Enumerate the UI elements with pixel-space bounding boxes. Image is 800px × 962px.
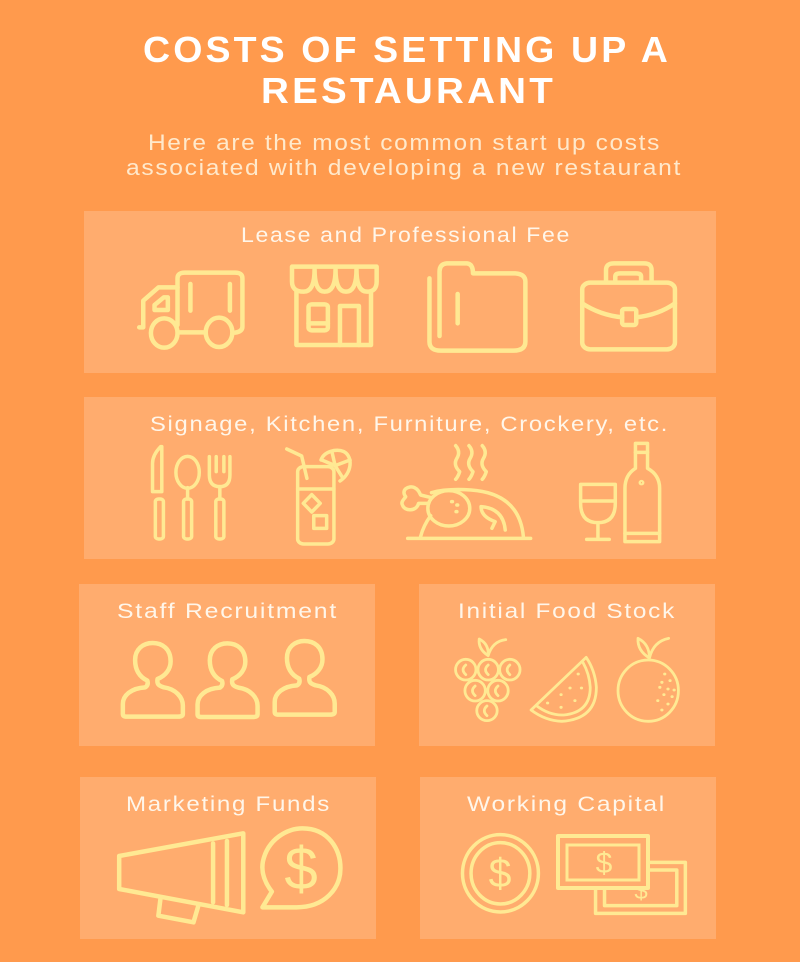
icon: drink with lemon: [287, 449, 350, 544]
subtitle: [126, 130, 682, 180]
subtitle: associated with developing a new restaurant: [126, 155, 682, 180]
panel: staff recruitment: [79, 584, 375, 746]
heading: initial food stock: Initial Food Stock: [458, 600, 676, 623]
panel: marketing funds: [80, 777, 376, 939]
icon: banknotes: $: [634, 878, 648, 905]
icon: watermelon slice: [531, 657, 596, 721]
icon: coin: $: [489, 850, 512, 896]
heading: lease and professional fee: Lease and Professional Fee: [241, 224, 571, 247]
icon: storefront: [292, 267, 377, 345]
panel: initial food stock: [419, 584, 715, 746]
icon: coin: [462, 835, 538, 912]
title: [143, 29, 671, 111]
icon: folder: [429, 263, 525, 351]
heading: signage, kitchen, furniture, crockery: Signage, Kitchen, Furniture, Crockery, etc.: [150, 413, 669, 436]
heading: staff recruitment: Staff Recruitment: [117, 600, 338, 623]
icon: orange: [618, 638, 678, 721]
heading: marketing funds: Marketing Funds: [126, 793, 331, 816]
icon: wine glass and bottle: [581, 443, 660, 542]
icon: banknotes: [558, 836, 685, 913]
icon: grapes: [456, 639, 520, 721]
panel: lease and professional fee: [84, 211, 716, 373]
icon: dollar speech bubble: [262, 828, 340, 907]
title: RESTAURANT: [261, 70, 556, 111]
icon: three staff silhouettes: [123, 641, 335, 717]
icon: megaphone: [119, 833, 243, 922]
icon: briefcase: [582, 263, 675, 349]
subtitle: Here are the most common start up costs: [148, 130, 661, 155]
icon: delivery truck: [139, 273, 242, 348]
panel: working capital: [420, 777, 716, 939]
icon: dollar speech bubble: $: [284, 835, 318, 902]
heading: working capital: Working Capital: [467, 793, 666, 816]
panel: signage, kitchen, furniture, crockery: [84, 397, 716, 559]
icon: roast chicken: [402, 446, 531, 538]
icon: banknotes: $: [596, 847, 613, 880]
icon: cutlery: [153, 447, 230, 539]
title: COSTS OF SETTING UP A: [143, 29, 671, 70]
